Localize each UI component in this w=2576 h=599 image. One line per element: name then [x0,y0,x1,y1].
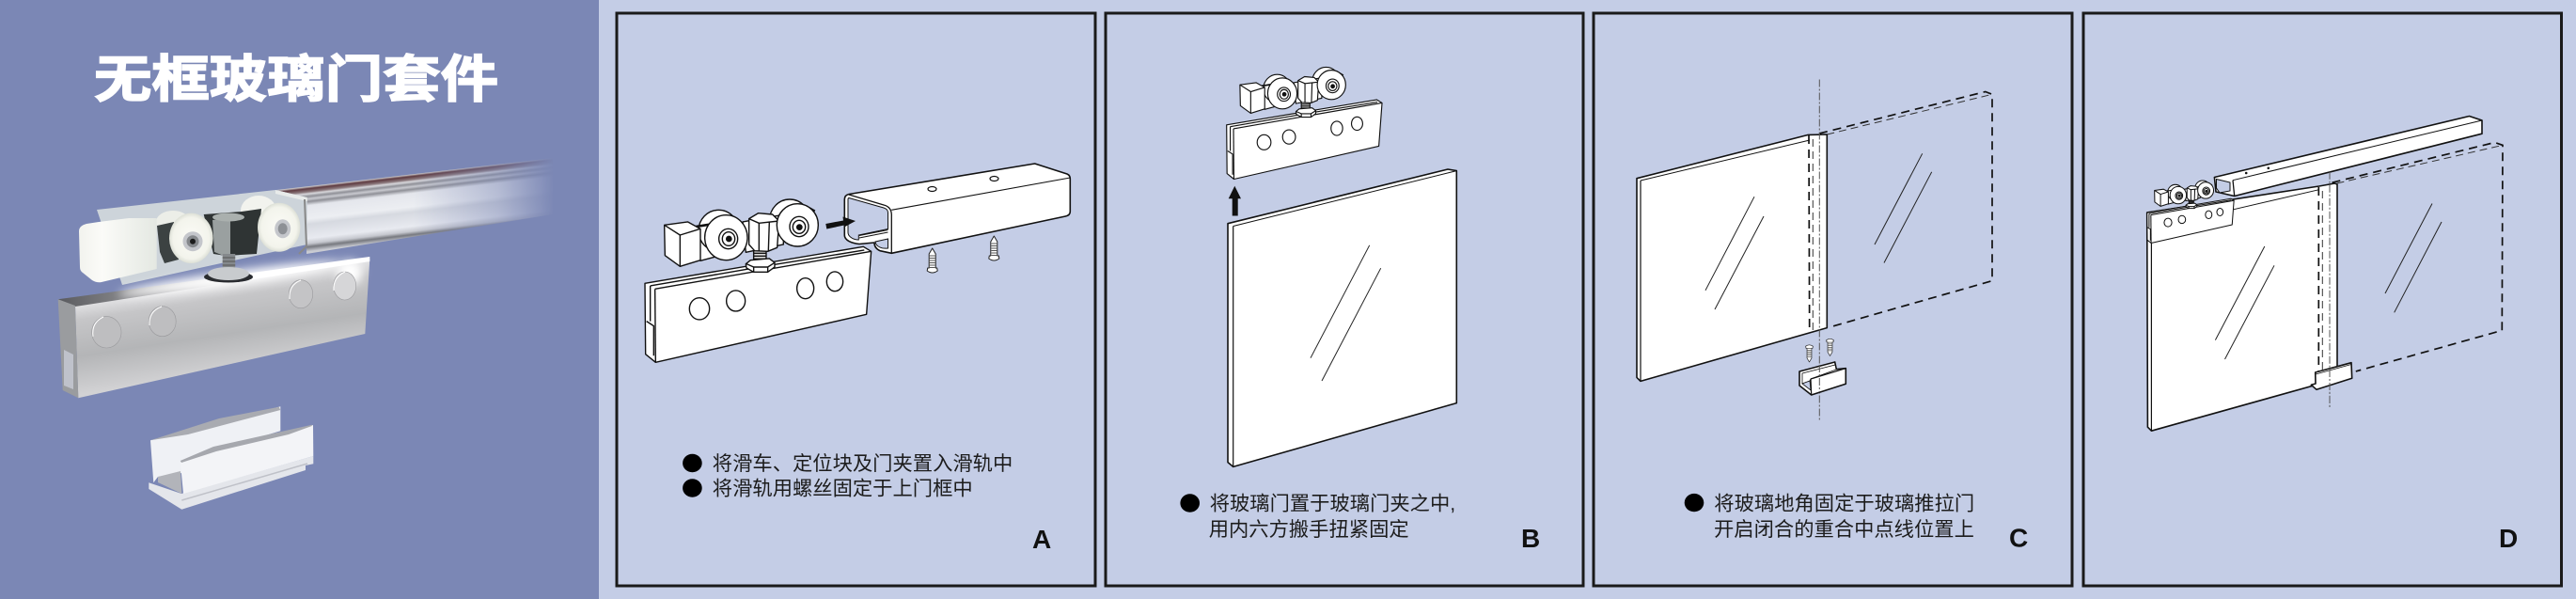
panel C: center line [1818,79,1820,420]
panel D: glass door [2147,183,2337,431]
panel A: letter: A [1032,525,1051,554]
panel D [2083,13,2561,586]
title: 无框玻璃门套件 [94,52,498,108]
panel B: glass door [1228,169,1456,466]
panel A: instructions: 将滑车、定位块及门夹置入滑轨中 [713,452,1013,475]
panel A [617,13,1095,586]
panel A: instructions [683,452,1013,500]
panel B: hanger assembly [1227,67,1382,180]
product render: floor guide [149,406,313,510]
panel B: letter: B [1521,524,1540,553]
panel A: hanger assembly [645,199,872,362]
panel B: instructions: 将玻璃门置于玻璃门夹之中, [1210,493,1455,515]
panel B: instructions [1180,493,1455,541]
product render: sliding rail [276,158,553,254]
panel A: arrow [825,216,856,229]
panel C: ghost door outline [1819,92,1992,326]
panel C: letter: C [2009,523,2028,553]
panel D: rail [2214,117,2482,196]
panel D: hanger assembly [2147,181,2234,244]
panel D: center line [2329,172,2331,409]
panel C: glass door [1637,134,1827,381]
panel C: instructions: 将玻璃地角固定于玻璃推拉门 [1714,493,1974,515]
panel A: rail [844,164,1070,253]
panel A: instructions: 将滑轨用螺丝固定于上门框中 [713,478,973,500]
product render: roller carriage [79,190,307,285]
panel C [1594,13,2072,586]
panel D: letter: D [2499,524,2518,553]
product render: glass clamp [58,254,369,398]
panel D: floor guide [2311,363,2352,409]
panel A: screws [927,236,999,273]
panel B: arrow [1229,186,1241,216]
panel C: floor guide [1799,362,1846,395]
panel B: instructions: 用内六方搬手扭紧固定 [1209,518,1409,541]
panel C: screws [1806,339,1833,362]
panel D: ghost door outline [2332,143,2503,371]
panel C: instructions [1685,493,1974,541]
panel C: instructions: 开启闭合的重合中点线位置上 [1714,518,1974,541]
panel B [1106,13,1583,586]
left product panel [0,0,599,599]
